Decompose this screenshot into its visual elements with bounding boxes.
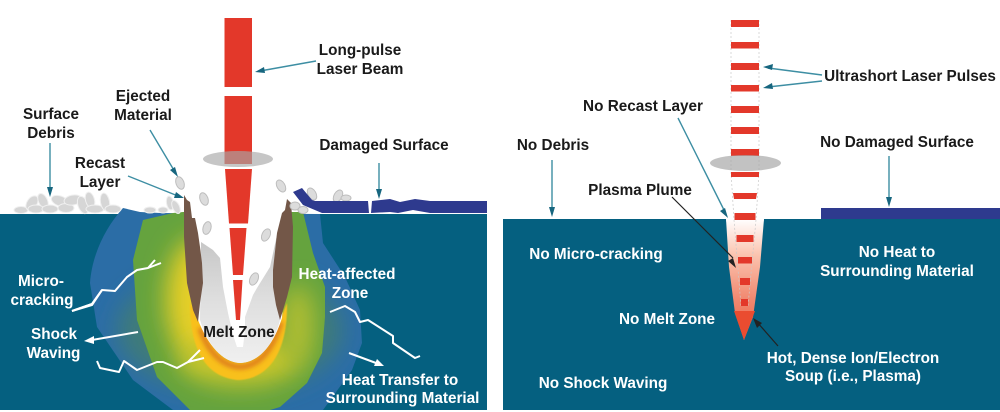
label: heat-affected zone: Heat-affected (299, 266, 395, 283)
plasma soup pointer (753, 318, 778, 346)
label: no debris: No Debris (517, 137, 589, 154)
plasma tip (734, 311, 755, 340)
label: no damaged surface: No Damaged Surface (820, 134, 974, 151)
label: shock waving: Waving (27, 345, 80, 362)
ejected particles (174, 176, 351, 287)
label: long-pulse laser beam: Laser Beam (317, 61, 403, 78)
panel: ultrashort laser (503, 20, 1000, 410)
label: no melt zone: No Melt Zone (619, 311, 715, 328)
leader arrows (47, 61, 382, 199)
shock halo (90, 208, 362, 410)
label: ejected material: Ejected (116, 88, 170, 105)
label: ejected material: Material (114, 107, 172, 124)
plasma plume pointer (672, 197, 736, 268)
label: hot dense soup: Hot, Dense Ion/Electron (767, 350, 939, 367)
label: no heat: No Heat to (859, 244, 935, 261)
panel: long-pulse laser (0, 18, 487, 410)
label: surface debris: Surface (23, 106, 79, 123)
laser pulses (731, 20, 759, 306)
plasma plume (726, 219, 764, 340)
microcracks (72, 260, 420, 372)
label: shock waving: Shock (31, 326, 77, 343)
label: heat transfer: Heat Transfer to (342, 372, 458, 389)
label: damaged surface: Damaged Surface (319, 137, 449, 154)
heat-affected zone (133, 212, 325, 410)
label: micro-cracking: Micro- (18, 273, 64, 290)
debris cluster (14, 191, 182, 215)
label: ultrashort laser pulses: Ultrashort Laser Pulses (824, 68, 996, 85)
focusing lens right (710, 155, 781, 171)
label: heat transfer: Surrounding Material (326, 390, 479, 407)
laser beam (224, 18, 252, 320)
no damaged surface bar (821, 208, 1000, 219)
label: no micro-cracking: No Micro-cracking (529, 246, 663, 263)
label: hot dense soup: Soup (i.e., Plasma) (785, 368, 921, 385)
label: heat-affected zone: Zone (332, 285, 368, 302)
beam envelope (731, 20, 759, 306)
substrate block right (503, 219, 1000, 410)
label: surface debris: Debris (27, 125, 75, 142)
ablated cavity (186, 190, 290, 363)
damaged surface (293, 188, 487, 213)
melt layer (190, 303, 287, 380)
focusing lens (203, 151, 273, 167)
heat transfer arrow (349, 353, 384, 366)
label: micro-cracking: cracking (11, 292, 73, 309)
recast layer left (184, 195, 203, 322)
label: plasma plume: Plasma Plume (588, 182, 692, 199)
substrate block (0, 214, 487, 410)
label: recast layer: Recast (75, 155, 125, 172)
label: no recast layer: No Recast Layer (583, 98, 703, 115)
label: recast layer: Layer (80, 174, 120, 191)
recast layer right (273, 199, 293, 320)
label: no shock waving: No Shock Waving (539, 375, 667, 392)
leader arrows right (549, 64, 892, 218)
label: long-pulse laser beam: Long-pulse (319, 42, 401, 59)
shock arrow (84, 332, 138, 344)
label: melt zone: Melt Zone (203, 324, 275, 341)
label: no heat: Surrounding Material (820, 263, 974, 280)
cavity gray walls (200, 235, 281, 363)
